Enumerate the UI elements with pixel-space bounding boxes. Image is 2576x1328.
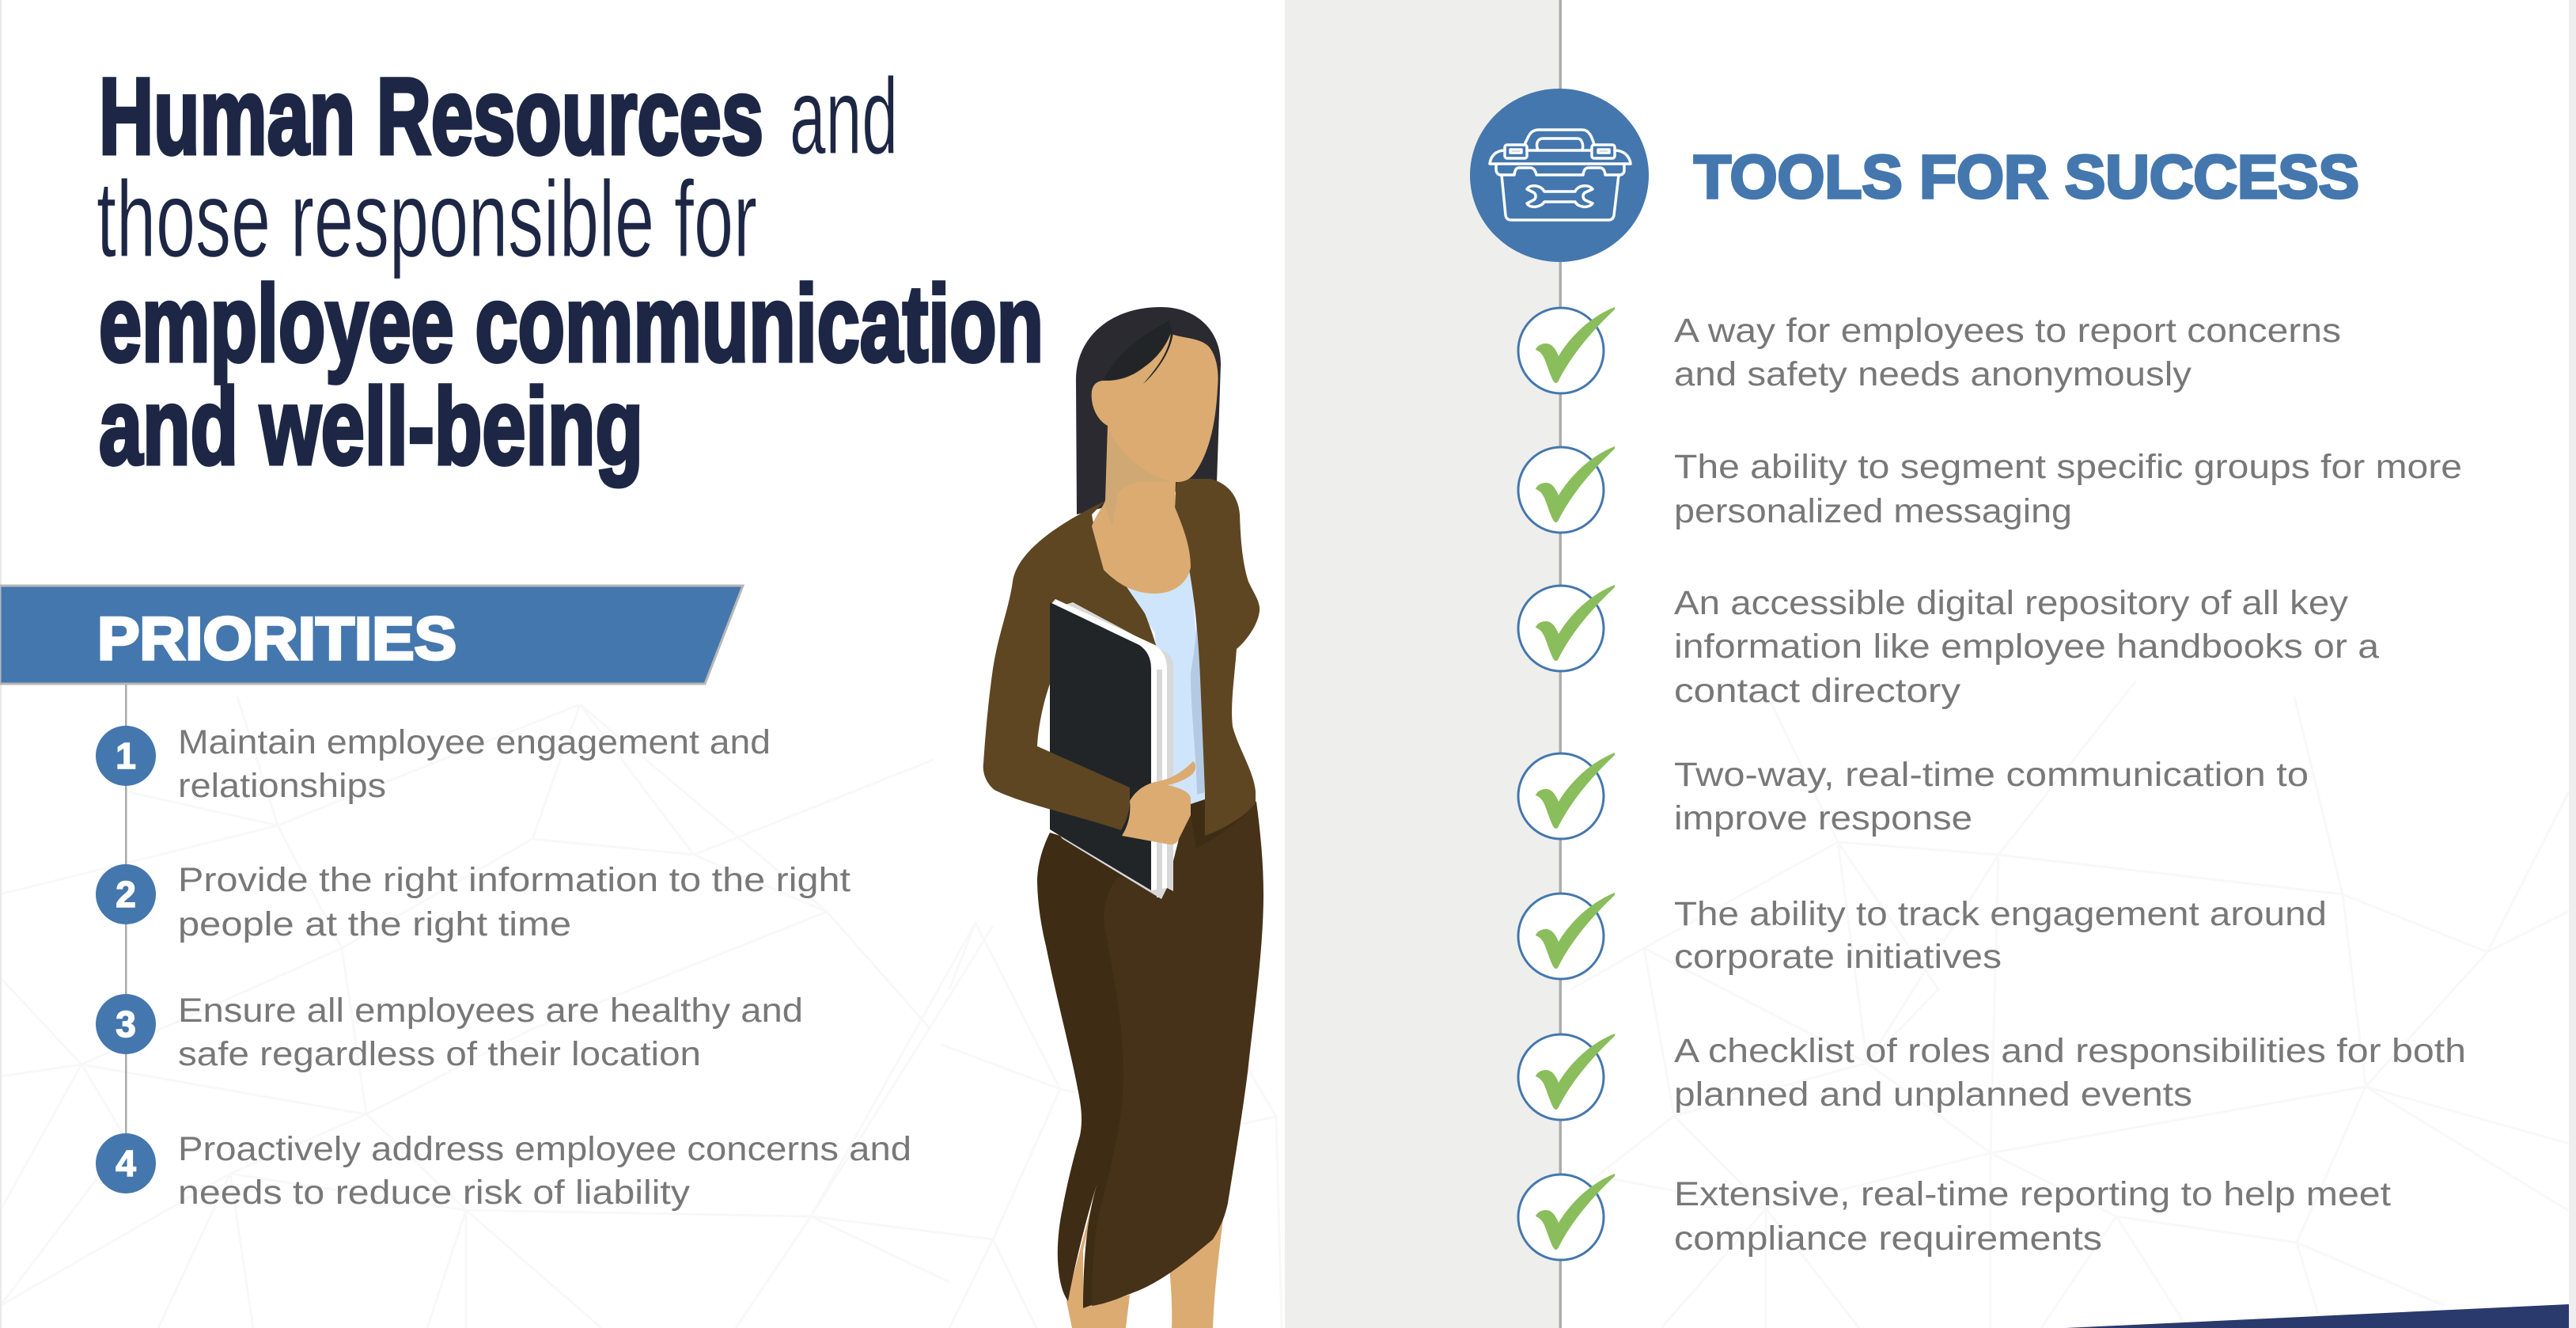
shirt: [1092, 507, 1206, 815]
tool 2: personalized messaging: [1674, 492, 2072, 530]
priority 2: [96, 861, 850, 943]
hand: [1122, 761, 1195, 844]
tool 7: Extensive, real-time reporting to help meet: [1674, 1175, 2391, 1213]
panel: priorities banner: [0, 586, 743, 684]
title: and well-being: [99, 366, 643, 488]
priority 1: Maintain employee engagement and: [178, 723, 771, 761]
tools timeline line: [1559, 0, 1562, 1328]
tool 5: corporate initiatives: [1674, 938, 2002, 976]
illustration: woman holding folder: [983, 307, 1263, 1328]
priority 2: 2: [116, 874, 136, 915]
tool 4: [1518, 753, 2309, 839]
face and neck: [1092, 332, 1218, 594]
priority 2: Provide the right information to the right: [178, 861, 850, 899]
tool 2: [1518, 446, 2462, 533]
tool 2: The ability to segment specific groups for more: [1674, 448, 2462, 486]
title: and: [790, 56, 898, 177]
priority 1: [96, 723, 771, 805]
tool 1: and safety needs anonymously: [1674, 355, 2192, 393]
skirt: [1037, 791, 1263, 1308]
front hair lock: [1104, 321, 1173, 384]
title: employee communication: [99, 264, 1044, 385]
priorities timeline line: [125, 684, 127, 1163]
tool 3: information like employee handbooks or a: [1674, 628, 2379, 666]
tool 4: improve response: [1674, 799, 1972, 837]
priority 2: people at the right time: [178, 905, 571, 943]
priority 4: [96, 1130, 911, 1212]
title: [97, 56, 1044, 488]
forearm sleeve: [983, 736, 1130, 830]
panel: tools list: [1518, 307, 2466, 1260]
folder: [1050, 599, 1173, 899]
tool 6: planned and unplanned events: [1674, 1076, 2192, 1114]
priority 3: safe regardless of their location: [178, 1035, 701, 1073]
heading: tools for success: TOOLS FOR SUCCESS: [1694, 143, 2359, 211]
right margin strip: [2569, 0, 2576, 1328]
tool 5: [1518, 893, 2327, 979]
priority 3: 3: [116, 1004, 136, 1045]
tool 1: [1518, 307, 2341, 393]
tool 1: A way for employees to report concerns: [1674, 312, 2341, 350]
priority 3: Ensure all employees are healthy and: [178, 992, 803, 1030]
hair: [1076, 307, 1221, 514]
tool 7: compliance requirements: [1674, 1220, 2102, 1258]
tool 4: Two-way, real-time communication to: [1674, 756, 2309, 794]
legs: [1066, 1176, 1223, 1328]
title: Human Resources: [99, 56, 763, 177]
priority 1: 1: [116, 735, 136, 776]
grey centre column: [1285, 0, 1560, 1328]
tool 6: [1518, 1032, 2466, 1120]
tool 3: An accessible digital repository of all key: [1674, 584, 2349, 622]
priority 3: [96, 992, 803, 1073]
priority 4: needs to reduce risk of liability: [178, 1174, 691, 1212]
priority 1: relationships: [178, 767, 386, 805]
title: those responsible for: [97, 159, 757, 280]
jacket: [983, 479, 1260, 836]
tool 3: [1518, 584, 2379, 710]
tool 5: The ability to track engagement around: [1674, 895, 2327, 933]
panel: priorities banner: PRIORITIES: [97, 605, 456, 673]
tool 3: contact directory: [1674, 672, 1961, 710]
panel: priorities list: [96, 723, 911, 1212]
priority 4: Proactively address employee concerns and: [178, 1130, 911, 1168]
tool 7: [1518, 1174, 2391, 1260]
navy bottom corner wedge: [2066, 1304, 2569, 1328]
icon: toolbox in blue circle: [1470, 89, 1649, 262]
tool 6: A checklist of roles and responsibilities for both: [1674, 1032, 2466, 1070]
priority 4: 4: [116, 1143, 136, 1184]
